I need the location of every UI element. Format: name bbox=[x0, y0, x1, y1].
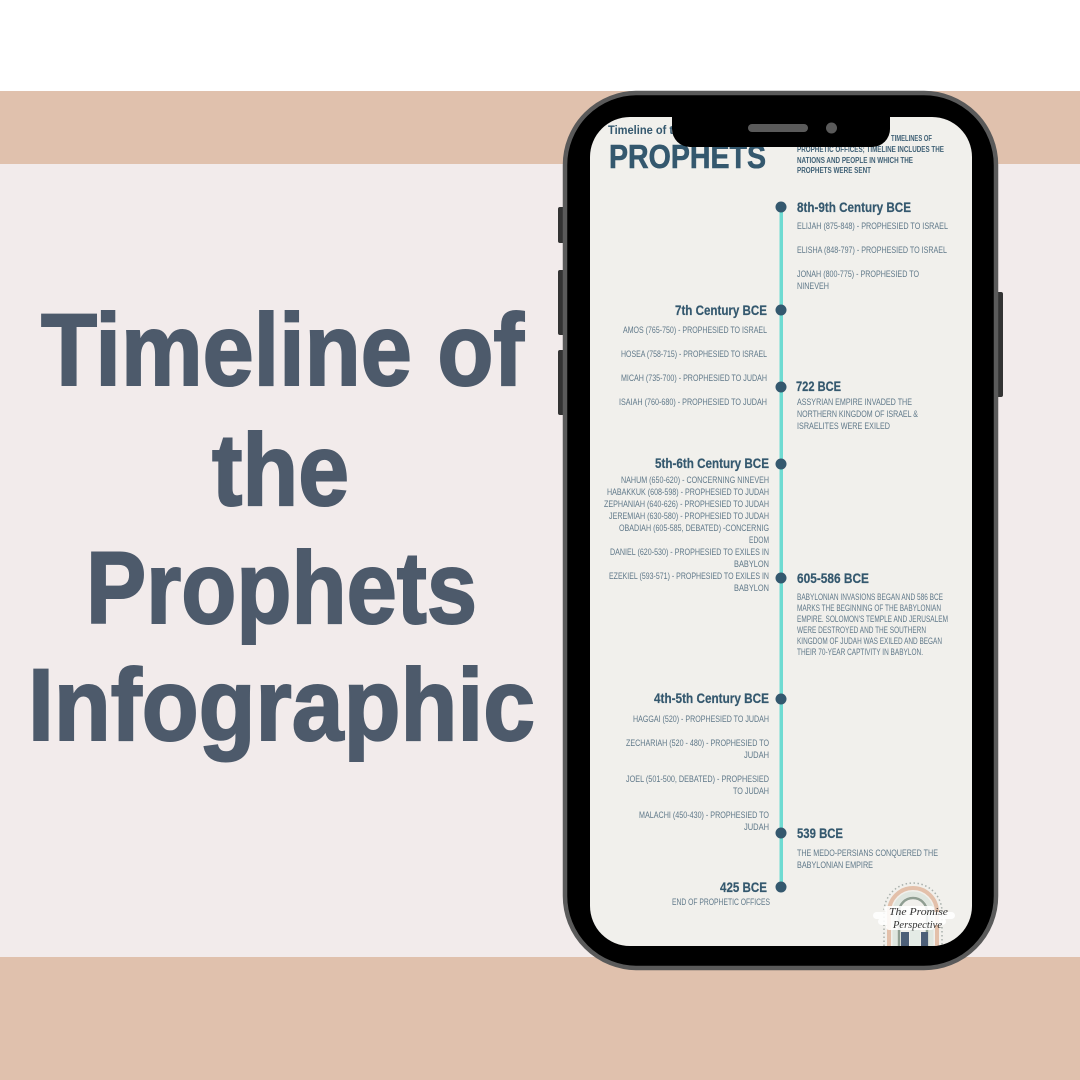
entry: 5th-6th century: 5th-6th Century BCE bbox=[655, 456, 769, 471]
entry: 5th-6th century: JEREMIAH (630-580) - PROPHESIED TO JUDAH bbox=[609, 511, 769, 521]
entry: 722 BCE bbox=[796, 379, 918, 431]
entry: 605-586 BCE: WERE DESTROYED AND THE SOUTHERN bbox=[797, 625, 926, 635]
entry: 722 BCE: NORTHERN KINGDOM OF ISRAEL & bbox=[797, 409, 918, 419]
entry: 425 BCE bbox=[672, 880, 770, 907]
entry: 7th century: ISAIAH (760-680) - PROPHESIED TO JUDAH bbox=[619, 397, 767, 407]
title: Infographic bbox=[28, 648, 535, 762]
pale middle band bbox=[0, 164, 1080, 957]
screen header: TIMELINES OF bbox=[891, 134, 932, 143]
entry: 425 BCE: 425 BCE bbox=[720, 880, 767, 895]
screen header: NATIONS AND PEOPLE IN WHICH THE bbox=[797, 156, 914, 165]
title bbox=[28, 293, 535, 762]
entry: 605-586 BCE bbox=[797, 571, 948, 657]
entry: 605-586 BCE: BABYLONIAN INVASIONS BEGAN AND 586 BCE bbox=[797, 592, 943, 602]
bottom peach band bbox=[0, 957, 1080, 1080]
entry: 4th-5th century: MALACHI (450-430) - PROPHESIED TO bbox=[639, 810, 769, 820]
entry: 5th-6th century: EDOM bbox=[749, 535, 769, 545]
top peach band bbox=[0, 91, 1080, 164]
entry: 7th century: 7th Century BCE bbox=[675, 303, 767, 318]
entry: 539 BCE: BABYLONIAN EMPIRE bbox=[797, 860, 873, 870]
entry: 722 BCE: 722 BCE bbox=[796, 379, 841, 394]
title: the bbox=[212, 413, 349, 527]
entry: 605-586 BCE: THEIR 70-YEAR CAPTIVITY IN BABYLON. bbox=[797, 647, 923, 657]
entry: 605-586 BCE: EMPIRE. SOLOMON'S TEMPLE AND JERUSALEM bbox=[797, 614, 948, 624]
entry: 4th-5th century: JUDAH bbox=[744, 822, 769, 832]
entry: 722 BCE: ISRAELITES WERE EXILED bbox=[797, 421, 890, 431]
logo: rainbow, The Promise Perspective: Perspective bbox=[892, 919, 942, 931]
entry: 8th-9th century: JONAH (800-775) - PROPHESIED TO bbox=[797, 269, 919, 279]
logo: rainbow, The Promise Perspective: The Promise bbox=[889, 906, 948, 918]
title: Timeline of bbox=[41, 293, 525, 407]
entry: 722 BCE: ASSYRIAN EMPIRE INVADED THE bbox=[797, 397, 912, 407]
phone mockup bbox=[558, 93, 1003, 968]
entry: 539 BCE bbox=[797, 826, 938, 870]
entry: 4th-5th century: ZECHARIAH (520 - 480) - PROPHESIED TO bbox=[626, 738, 769, 748]
entry: 5th-6th century: EZEKIEL (593-571) - PROPHESIED TO EXILES IN bbox=[609, 571, 769, 581]
screen header bbox=[608, 125, 945, 175]
entry: 8th-9th century: 8th-9th Century BCE bbox=[797, 200, 911, 215]
entry: 605-586 BCE: KINGDOM OF JUDAH WAS EXILED AND BEGAN bbox=[797, 636, 942, 646]
entry: 8th-9th century: ELIJAH (875-848) - PROPHESIED TO ISRAEL bbox=[797, 221, 948, 231]
phone notch bbox=[672, 117, 890, 147]
entry: 5th-6th century: DANIEL (620-530) - PROPHESIED TO EXILES IN bbox=[610, 547, 769, 557]
phone screen bbox=[590, 117, 972, 946]
entry: 5th-6th century: BABYLON bbox=[734, 583, 769, 593]
logo: rainbow, The Promise Perspective bbox=[873, 883, 955, 950]
entry: 425 BCE: END OF PROPHETIC OFFICES bbox=[672, 897, 770, 907]
entry: 4th-5th century: JOEL (501-500, DEBATED) - PROPHESIED bbox=[626, 774, 769, 784]
entry: 605-586 BCE: 605-586 BCE bbox=[797, 571, 869, 586]
screen header: PROPHETIC OFFICES; TIMELINE INCLUDES THE bbox=[797, 145, 945, 154]
entry: 7th century: MICAH (735-700) - PROPHESIED TO JUDAH bbox=[621, 373, 767, 383]
screen header: PROPHETS WERE SENT bbox=[797, 166, 871, 175]
entry: 5th-6th century bbox=[604, 456, 769, 593]
entry: 4th-5th century bbox=[626, 691, 769, 832]
timeline dots bbox=[776, 202, 786, 892]
entry: 4th-5th century: HAGGAI (520) - PROPHESIED TO JUDAH bbox=[633, 714, 769, 724]
entry: 5th-6th century: NAHUM (650-620) - CONCERNING NINEVEH bbox=[621, 475, 769, 485]
entry: 7th century: AMOS (765-750) - PROPHESIED TO ISRAEL bbox=[623, 325, 767, 335]
entry: 5th-6th century: BABYLON bbox=[734, 559, 769, 569]
entry: 8th-9th century: NINEVEH bbox=[797, 281, 829, 291]
entry: 539 BCE: THE MEDO-PERSIANS CONQUERED THE bbox=[797, 848, 938, 858]
title: Prophets bbox=[86, 531, 477, 645]
entry: 5th-6th century: ZEPHANIAH (640-626) - PROPHESIED TO JUDAH bbox=[604, 499, 769, 509]
entry: 539 BCE: 539 BCE bbox=[797, 826, 843, 841]
entry: 7th century: HOSEA (758-715) - PROPHESIED TO ISRAEL bbox=[621, 349, 767, 359]
screen header: PROPHETS bbox=[609, 138, 766, 175]
entry: 4th-5th century: 4th-5th Century BCE bbox=[654, 691, 769, 706]
entry: 8th-9th century bbox=[797, 200, 948, 291]
timeline axis bbox=[780, 207, 783, 887]
entry: 4th-5th century: TO JUDAH bbox=[733, 786, 769, 796]
screen header: Timeline of the bbox=[608, 125, 686, 137]
phone side buttons bbox=[558, 207, 1003, 415]
entry: 605-586 BCE: MARKS THE BEGINNING OF THE BABYLONIAN bbox=[797, 603, 941, 613]
entry: 7th century bbox=[619, 303, 767, 407]
entry: 4th-5th century: JUDAH bbox=[744, 750, 769, 760]
entry: 8th-9th century: ELISHA (848-797) - PROPHESIED TO ISRAEL bbox=[797, 245, 947, 255]
entry: 5th-6th century: OBADIAH (605-585, DEBATED) -CONCERNIG bbox=[619, 523, 769, 533]
phone body bbox=[565, 93, 996, 968]
entry: 5th-6th century: HABAKKUK (608-598) - PROPHESIED TO JUDAH bbox=[607, 487, 769, 497]
